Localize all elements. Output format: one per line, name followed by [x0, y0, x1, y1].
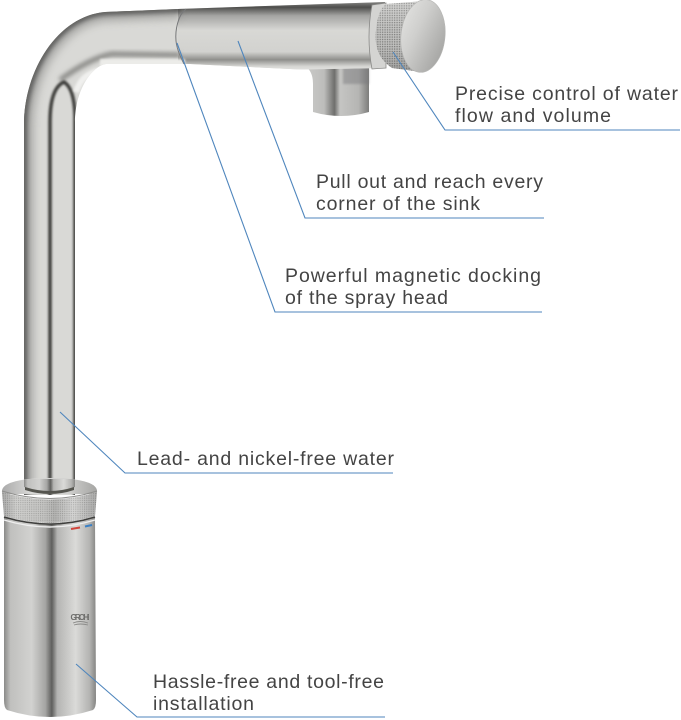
spout outlet — [300, 62, 369, 116]
cold indicator — [85, 525, 92, 526]
base disc — [2, 478, 97, 498]
pipe and arched neck — [24, 2, 385, 495]
logo — [70, 614, 89, 626]
knob face — [397, 0, 449, 75]
callout: pull out: corner of the sink — [316, 193, 480, 215]
callout: installation — [76, 664, 385, 717]
callout: installation: Hassle-free and tool-free — [153, 671, 384, 693]
hot indicator — [71, 528, 80, 529]
callout: magnetic docking: of the spray head — [285, 287, 448, 309]
spray head seam — [176, 9, 186, 64]
callout: magnetic docking: Powerful magnetic docking — [285, 265, 541, 287]
logo: GROHE — [70, 613, 93, 622]
callout: precise control — [393, 52, 680, 130]
callout: magnetic docking — [177, 43, 542, 312]
knurled base ring — [2, 492, 97, 523]
knurled band — [376, 1, 424, 72]
callout: precise control: flow and volume — [455, 105, 611, 127]
callout: pull out: Pull out and reach every — [316, 171, 543, 193]
callout: lead free: Lead- and nickel-free water — [137, 448, 394, 470]
callout: precise control: Precise control of water — [455, 83, 678, 105]
control knob — [376, 0, 449, 75]
callout: installation: installation — [153, 693, 254, 715]
faucet — [0, 0, 449, 717]
base body — [4, 517, 96, 717]
callout: lead free — [60, 412, 394, 473]
callout: pull out — [238, 41, 544, 218]
collar — [369, 3, 386, 69]
